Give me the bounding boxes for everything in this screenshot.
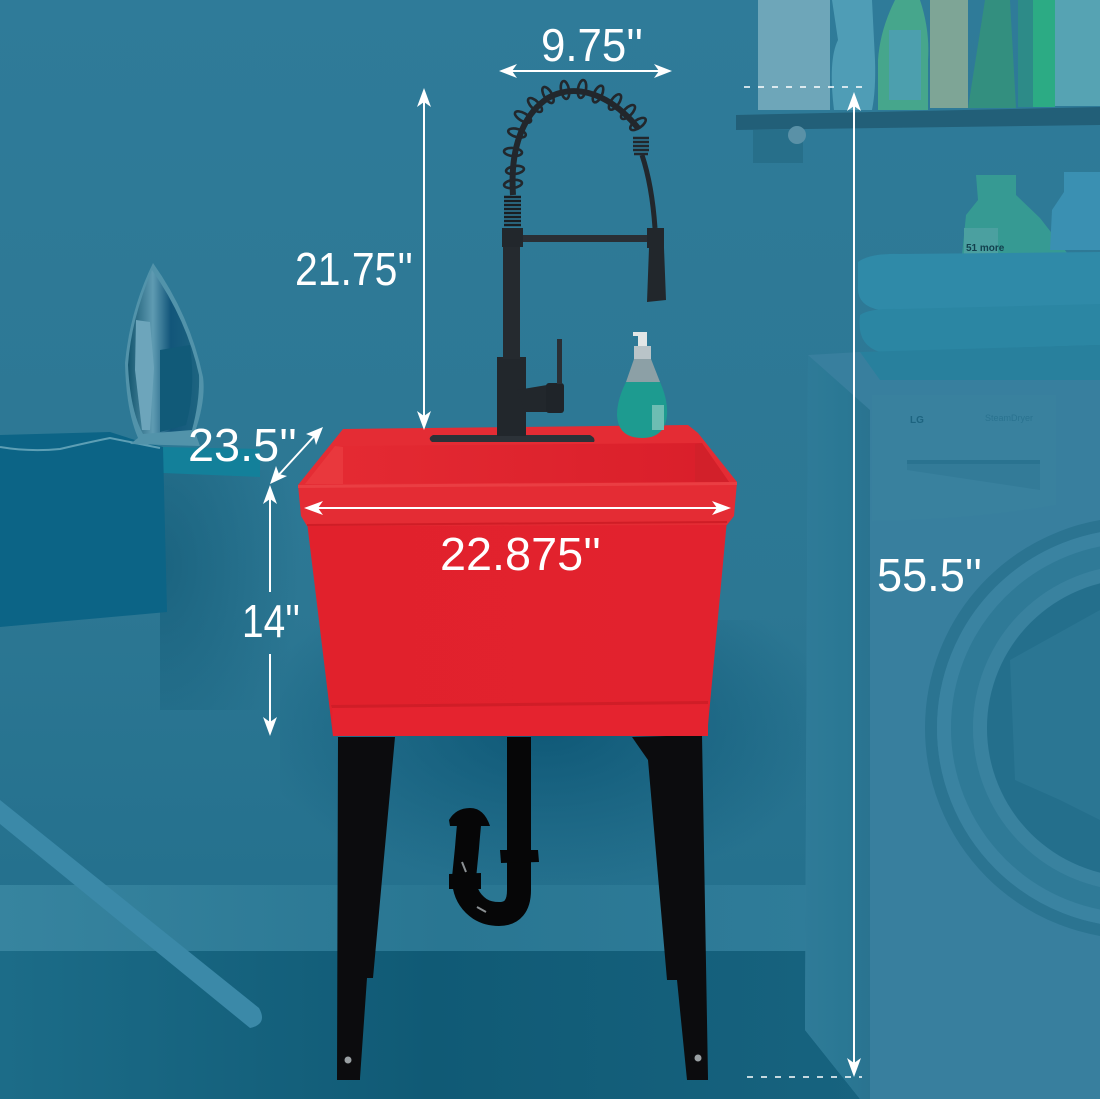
dimension: total height 55.5 inches	[744, 87, 982, 1077]
black spring faucet	[430, 79, 666, 442]
shelf with bottles	[736, 0, 1100, 163]
dimension: faucet spread 9.75 inches: 9.75''	[541, 19, 643, 71]
ironing board cover	[0, 432, 260, 627]
faucet deck plate	[430, 435, 594, 442]
dimension: tub height 14 inches	[242, 485, 300, 736]
soap dispenser	[617, 332, 667, 438]
sink stand legs	[337, 735, 708, 1080]
washer door	[931, 523, 1100, 933]
rim	[298, 425, 737, 526]
dimension: tub height 14 inches: 14''	[242, 595, 300, 647]
ironing board leg	[0, 800, 262, 1028]
dimension: total height 55.5 inches: 55.5''	[877, 549, 982, 601]
towels and detergent	[858, 172, 1100, 380]
dimension: width 22.875 inches: 22.875''	[440, 528, 601, 580]
washer control panel	[872, 395, 1100, 521]
towels and detergent: 51 more	[966, 243, 1005, 254]
red sink tub	[298, 425, 737, 736]
dimension: depth 23.5 inches	[188, 419, 323, 484]
washing machine	[805, 352, 1100, 1099]
dimension: faucet height 21.75 inches	[295, 88, 431, 430]
washer control panel: LG	[910, 415, 924, 426]
faucet hose and spring	[504, 79, 655, 228]
drain trap pipe	[449, 737, 539, 914]
dimension: faucet height 21.75 inches: 21.75''	[295, 243, 413, 295]
dimension: faucet spread 9.75 inches	[499, 19, 672, 78]
clothes iron	[125, 263, 204, 446]
washer control panel: SteamDryer	[985, 413, 1033, 423]
dimension: width 22.875 inches	[304, 501, 731, 580]
dimension: depth 23.5 inches: 23.5''	[188, 419, 297, 471]
